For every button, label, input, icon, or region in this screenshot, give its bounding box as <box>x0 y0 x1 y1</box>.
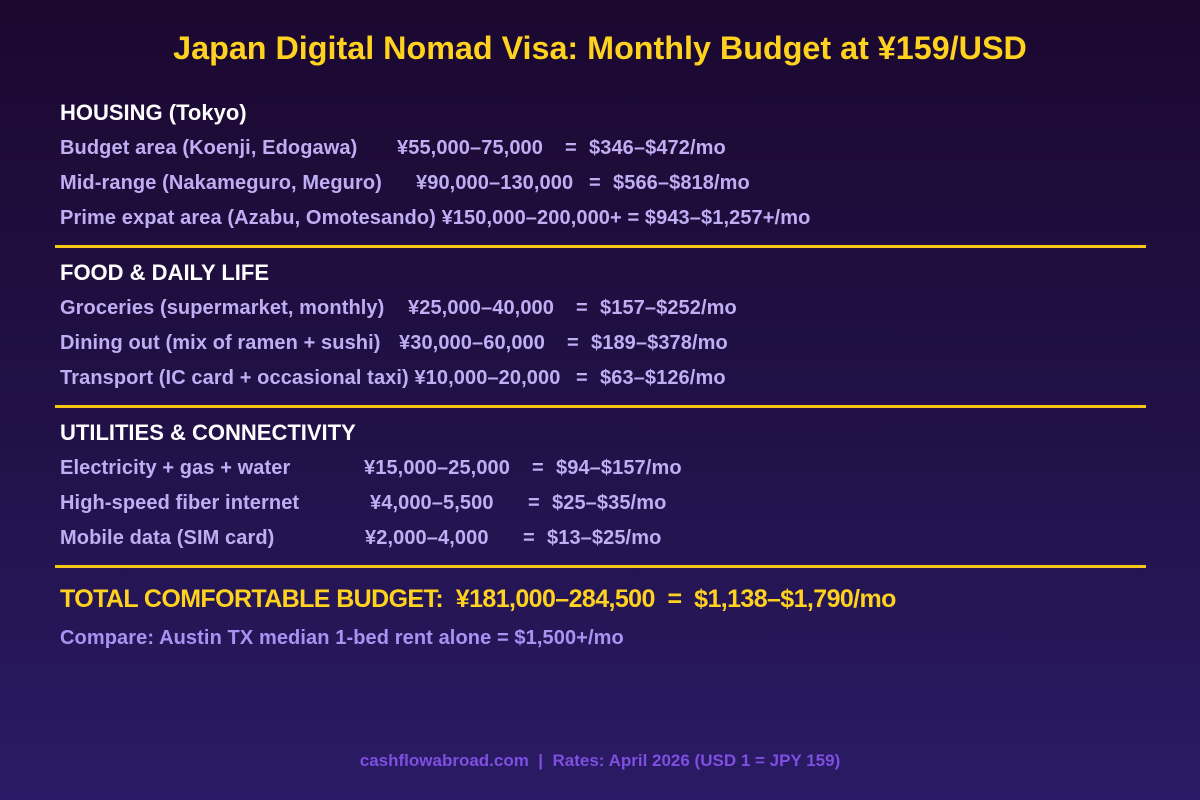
compare note: Compare: Austin TX median 1-bed rent alone = $1,500+/mo <box>60 627 624 649</box>
row: internet: $25–$35/mo <box>552 492 666 514</box>
row: groceries: = <box>576 297 588 319</box>
row: budget area <box>60 137 726 159</box>
panel: food <box>60 260 737 389</box>
row: electricity: Electricity + gas + water <box>60 457 290 479</box>
row: mobile: = <box>523 527 535 549</box>
row: mobile: $13–$25/mo <box>547 527 661 549</box>
footer: cashflowabroad.com | Rates: April 2026 (USD 1 = JPY 159) <box>360 751 840 770</box>
row: transport: Transport (IC card + occasional taxi) ¥10,000–20,000 <box>60 367 560 389</box>
row: electricity: $94–$157/mo <box>556 457 682 479</box>
row: groceries: Groceries (supermarket, monthly) <box>60 297 384 319</box>
row: dining: = <box>567 332 579 354</box>
row: groceries: ¥25,000–40,000 <box>408 297 554 319</box>
row: transport: = <box>576 367 588 389</box>
row: dining: ¥30,000–60,000 <box>399 332 545 354</box>
panel: utilities <box>60 420 682 549</box>
title: Japan Digital Nomad Visa: Monthly Budget at ¥159/USD <box>173 30 1027 66</box>
row: mobile: ¥2,000–4,000 <box>365 527 489 549</box>
row: internet <box>60 492 666 514</box>
row: mid-range: = <box>589 172 601 194</box>
row: budget area: ¥55,000–75,000 <box>397 137 543 159</box>
row: internet: = <box>528 492 540 514</box>
total budget: TOTAL COMFORTABLE BUDGET: ¥181,000–284,500 = $1,138–$1,790/mo <box>60 585 896 613</box>
row: electricity: ¥15,000–25,000 <box>364 457 510 479</box>
row: mid-range: Mid-range (Nakameguro, Meguro) <box>60 172 382 194</box>
row: groceries: $157–$252/mo <box>600 297 737 319</box>
row: electricity: = <box>532 457 544 479</box>
row: budget area: $346–$472/mo <box>589 137 726 159</box>
heading: housing: HOUSING (Tokyo) <box>60 100 247 125</box>
row: budget area: = <box>565 137 577 159</box>
row: transport: $63–$126/mo <box>600 367 726 389</box>
row: dining: $189–$378/mo <box>591 332 728 354</box>
row: dining: Dining out (mix of ramen + sushi) <box>60 332 381 354</box>
row: mid-range: $566–$818/mo <box>613 172 750 194</box>
row: prime expat: Prime expat area (Azabu, Omotesando) ¥150,000–200,000+ = $943–$1,257+/mo <box>60 207 810 229</box>
row: mobile: Mobile data (SIM card) <box>60 527 274 549</box>
heading: utilities: UTILITIES & CONNECTIVITY <box>60 420 356 445</box>
row: budget area: Budget area (Koenji, Edogawa) <box>60 137 357 159</box>
row: groceries <box>60 297 737 319</box>
row: dining <box>60 332 728 354</box>
row: internet: High-speed fiber internet <box>60 492 299 514</box>
row: mid-range: ¥90,000–130,000 <box>416 172 573 194</box>
row: internet: ¥4,000–5,500 <box>370 492 494 514</box>
row: mid-range <box>60 172 750 194</box>
heading: food: FOOD & DAILY LIFE <box>60 260 269 285</box>
row: mobile <box>60 527 661 549</box>
row: electricity <box>60 457 682 479</box>
panel: housing <box>60 100 810 229</box>
